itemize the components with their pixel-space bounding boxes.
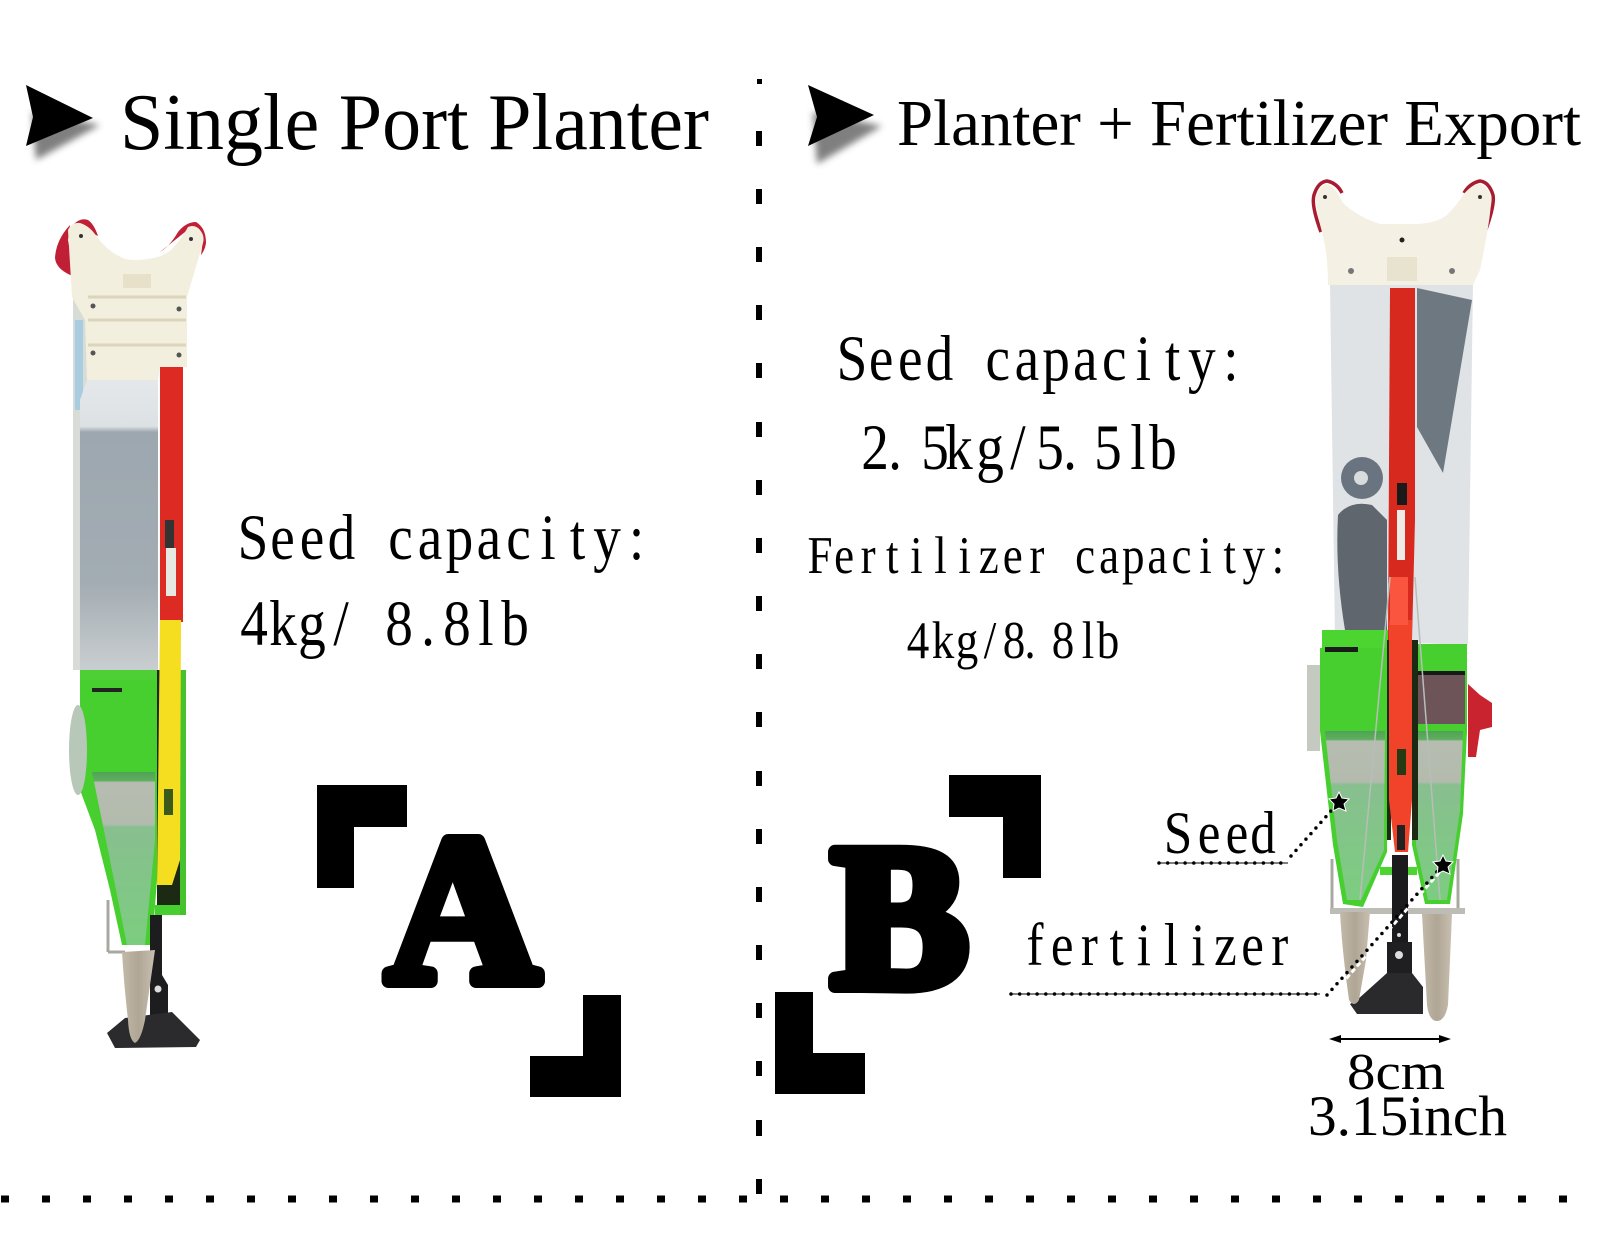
arrow icon B (808, 85, 882, 164)
letter A badge: A (386, 792, 540, 1027)
heading B: Planter + Fertilizer Export (897, 87, 1581, 160)
fertilizer callout (1011, 855, 1453, 996)
dotted horizontal divider (1, 1196, 1570, 1202)
seed and fertilizer capacity text B: 4kg/8.8lb (907, 611, 1119, 670)
seed capacity text A (238, 502, 644, 660)
seed callout: Seed (1164, 800, 1276, 867)
panel B: planter + fertilizer export (775, 85, 1581, 1148)
heading A: Single Port Planter (120, 79, 709, 167)
seed and fertilizer capacity text B (807, 323, 1284, 670)
fertilizer callout: fertilizer (1027, 912, 1289, 979)
planter B image (1307, 181, 1493, 1021)
panel A: single port planter (26, 79, 709, 1097)
width dimension text: 3.15inch (1308, 1085, 1507, 1148)
seed capacity text A: Seed capacity: (238, 502, 644, 574)
width dimension text: 8cm (1347, 1044, 1445, 1101)
seed capacity text A: 4kg/ 8.8lb (240, 588, 529, 660)
seed and fertilizer capacity text B: Seed capacity: (837, 323, 1239, 395)
dotted vertical divider (756, 79, 762, 1194)
seed callout (1159, 792, 1349, 867)
arrow icon A (26, 85, 100, 160)
letter A badge (317, 785, 621, 1097)
letter B badge: B (832, 804, 968, 1031)
width dimension text (1308, 1044, 1507, 1148)
width dimension arrow (1329, 1035, 1451, 1043)
planter A image (55, 219, 206, 1048)
seed and fertilizer capacity text B: Fertilizer capacity: (807, 526, 1284, 585)
letter B badge (775, 775, 1041, 1094)
seed and fertilizer capacity text B: 2.5kg/5.5lb (861, 412, 1177, 484)
